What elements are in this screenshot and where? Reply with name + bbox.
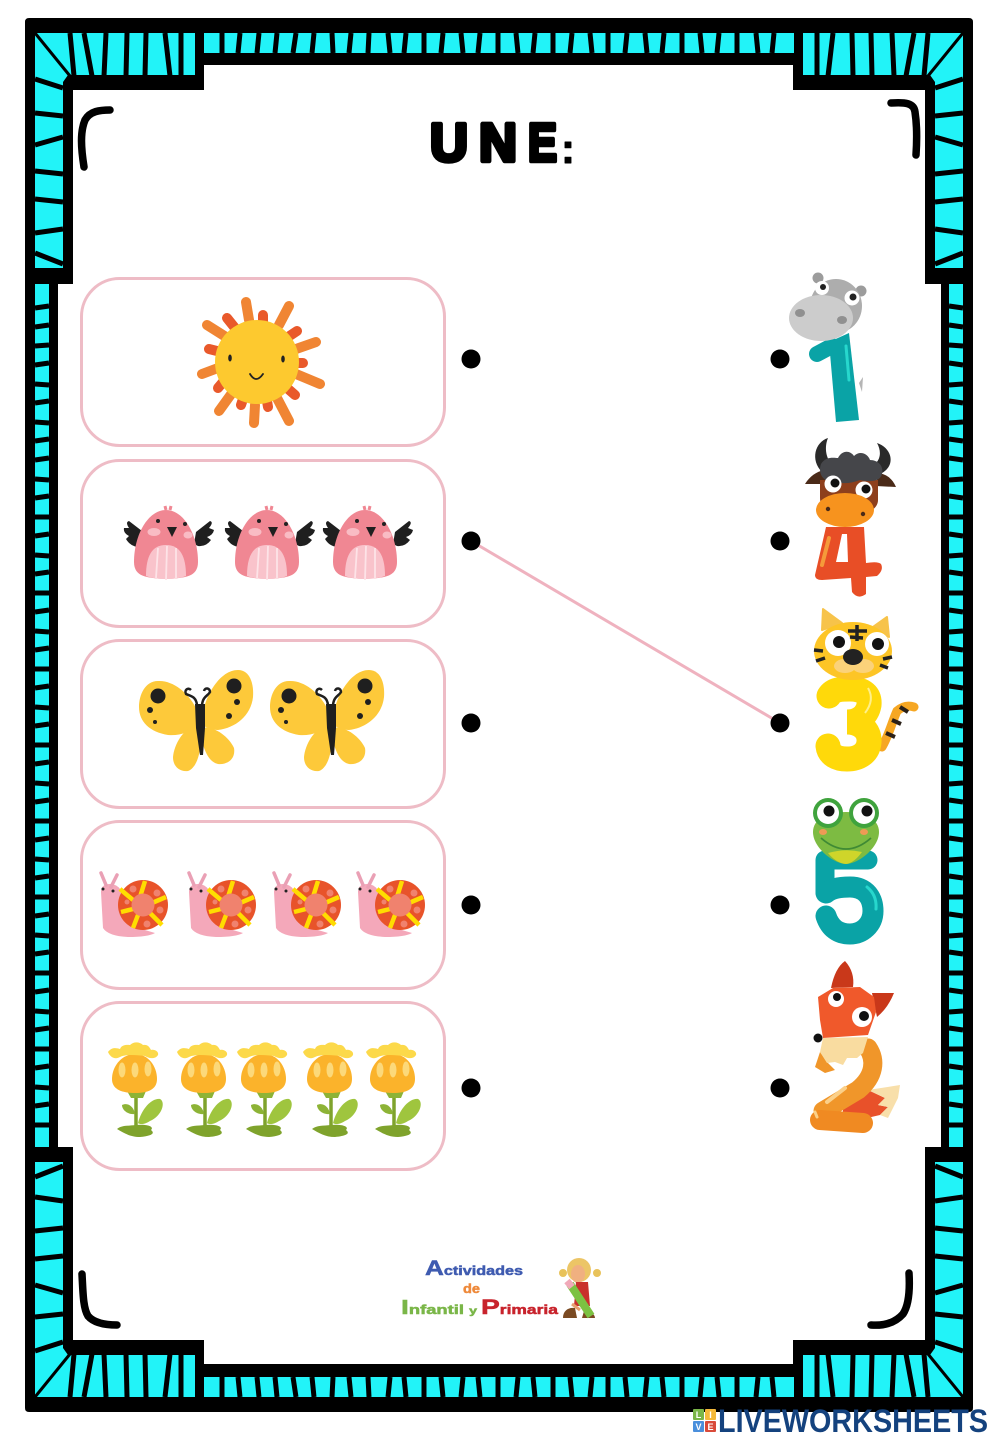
icon: flower 3 — [237, 1042, 292, 1137]
watermark icon — [693, 1409, 716, 1432]
icon: sun — [202, 302, 320, 423]
icon: bird 2 — [225, 506, 315, 580]
logo: Actividades de Infantil y Primaria: Infantil y — [401, 1297, 478, 1319]
number 3 tiger — [814, 609, 914, 759]
icon: snail 4 — [358, 873, 425, 937]
number 2 fox — [814, 961, 900, 1123]
title: E — [528, 113, 557, 173]
icon: snail 1 — [101, 873, 168, 937]
icon: butterfly 1 — [139, 670, 253, 771]
right connection dots — [770, 350, 790, 1098]
icon: flower 1 — [108, 1042, 163, 1137]
panel: five flowers — [82, 1002, 444, 1170]
number 5 frog — [813, 798, 879, 934]
watermark icon: V — [695, 1422, 702, 1432]
logo: Actividades de Infantil y Primaria: P rimaria — [481, 1296, 559, 1319]
icon: bird 1 — [124, 506, 214, 580]
panel: sun (1) — [82, 278, 444, 446]
icon: flower 4 — [303, 1042, 358, 1137]
title: U — [430, 113, 468, 173]
watermark icon: L — [696, 1410, 702, 1420]
watermark icon: I — [709, 1410, 712, 1420]
icon: flower 5 — [366, 1042, 421, 1137]
icon: butterfly 2 — [270, 670, 384, 771]
icon: snail 3 — [274, 873, 341, 937]
panel: two butterflies — [82, 640, 444, 808]
logo: Actividades de Infantil y Primaria — [401, 1257, 559, 1319]
panel: three birds — [82, 460, 444, 626]
logo: Actividades de Infantil y Primaria: A ctividades — [425, 1257, 523, 1280]
title: N — [479, 113, 517, 173]
logo: Actividades de Infantil y Primaria: de — [463, 1281, 480, 1296]
icon: snail 2 — [189, 873, 256, 937]
icon: flower 2 — [177, 1042, 232, 1137]
connecting line — [471, 541, 780, 723]
icon: girl with pencil — [559, 1258, 601, 1318]
title: : — [561, 125, 575, 172]
number 1 hippo — [789, 272, 866, 422]
watermark icon: E — [707, 1422, 714, 1432]
title — [430, 113, 575, 173]
panel: four snails — [82, 822, 444, 988]
number 4 bull — [805, 438, 896, 597]
left connection dots — [462, 350, 480, 1098]
icon: bird 3 — [323, 506, 413, 580]
corner brackets — [82, 103, 917, 1325]
